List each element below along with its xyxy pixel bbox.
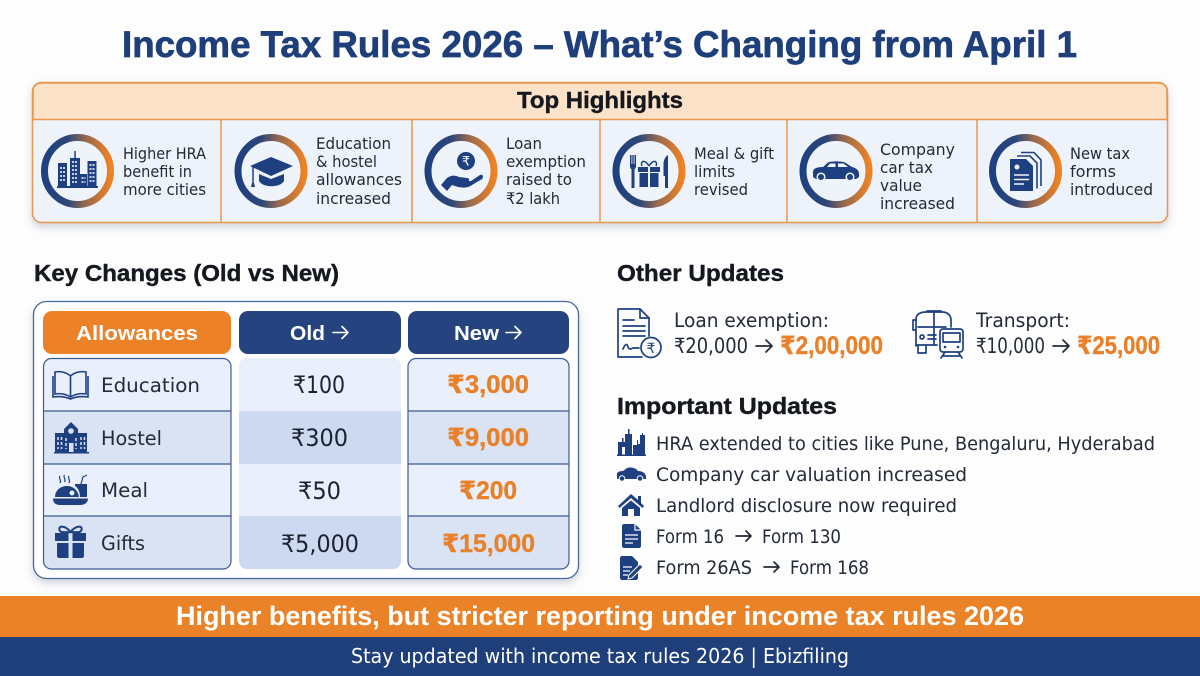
icon: document with pen <box>620 556 643 580</box>
column: new values <box>408 358 569 569</box>
text: education: Education <box>316 134 391 153</box>
text: loan: ₹2 lakh <box>506 189 560 208</box>
value: old gifts: ₹5,000 <box>281 530 359 558</box>
icon: house <box>618 494 644 516</box>
item: form 16: Form 16 <box>656 526 724 548</box>
icon: documents <box>1010 152 1041 191</box>
column header: old <box>239 311 401 354</box>
update: transport: ₹25,000 <box>1077 332 1160 360</box>
item: company car: Company car valuation increased <box>656 464 967 486</box>
text: meal: limits <box>694 162 735 181</box>
value: old education: ₹100 <box>293 371 345 399</box>
text: loan <box>506 134 586 208</box>
text: HRA: more cities <box>123 180 206 199</box>
text: loan: Loan <box>506 134 542 153</box>
icon: graduation cap <box>250 157 293 187</box>
update: transport: Transport: <box>975 309 1070 332</box>
row: hostel <box>54 422 162 454</box>
text: meal: Meal & gift <box>694 144 774 163</box>
text: loan: raised to <box>506 170 572 189</box>
update: loan exemption: ₹2,00,000 <box>780 332 883 360</box>
highlight: loan <box>428 134 586 208</box>
column header: allowances: Allowances <box>76 323 198 345</box>
icon: car <box>813 161 859 181</box>
text: new forms: forms <box>1070 162 1116 181</box>
icon: document with rupee <box>618 309 661 358</box>
icon: document <box>622 524 641 548</box>
update: transport <box>913 309 1160 360</box>
column: old values <box>239 358 401 569</box>
text: loan: exemption <box>506 152 586 171</box>
text: company car: car tax <box>880 158 933 177</box>
icon: open book <box>53 372 88 399</box>
column header: new <box>408 311 569 354</box>
icon: city <box>57 151 98 188</box>
banner: key message <box>0 596 1200 637</box>
footer <box>0 637 1200 676</box>
icon: meal <box>53 475 88 505</box>
value: new education: ₹3,000 <box>447 371 529 399</box>
icon: hand with rupee coin <box>441 152 483 191</box>
heading: top highlights: Top Highlights <box>517 87 683 113</box>
row: education <box>53 372 200 399</box>
column: allowances <box>43 358 231 569</box>
item: form 26AS: Form 168 <box>790 557 869 579</box>
column header: allowances <box>43 311 231 354</box>
item: form 16 <box>622 524 841 548</box>
row: gifts: Gifts <box>101 532 145 555</box>
item: form 26AS: Form 26AS <box>656 557 752 579</box>
text: company car: increased <box>880 194 955 213</box>
value: old hostel: ₹300 <box>291 424 348 452</box>
text: HRA <box>123 144 206 199</box>
icon: bus and train <box>913 311 963 358</box>
banner: key message: Higher benefits, but stricter reporting under income tax rules 2026 <box>176 601 1024 631</box>
text: company car <box>880 140 955 213</box>
text: education: & hostel <box>316 152 377 171</box>
column header: old: Old <box>290 323 325 345</box>
item: landlord disclosure: Landlord disclosure now required <box>656 495 957 517</box>
value: new hostel: ₹9,000 <box>447 424 529 452</box>
text: new forms: New tax <box>1070 144 1130 163</box>
item: form 16: Form 130 <box>762 526 841 548</box>
update: loan exemption: ₹20,000 <box>674 334 748 358</box>
item: form 26AS <box>620 556 869 580</box>
column header: new: New <box>454 323 499 345</box>
value: new gifts: ₹15,000 <box>442 530 535 558</box>
text: education <box>316 134 402 208</box>
text: meal <box>694 144 774 199</box>
item: HRA: HRA extended to cities like Pune, Bengaluru, Hyderabad <box>656 433 1155 455</box>
icon: car <box>617 467 646 481</box>
row: meal: Meal <box>101 479 148 502</box>
text: education: allowances <box>316 170 402 189</box>
highlight: company car <box>803 138 955 213</box>
update: loan exemption: Loan exemption: <box>674 309 829 332</box>
text: new forms: introduced <box>1070 180 1153 199</box>
text: company car: Company <box>880 140 955 159</box>
row: meal <box>53 475 148 505</box>
heading: other updates: Other Updates <box>617 260 784 286</box>
title: Income Tax Rules 2026 – What’s Changing from April 1 <box>122 24 1077 65</box>
text: meal: revised <box>694 180 748 199</box>
icon: fork, gift and knife <box>630 155 668 188</box>
highlight: meal and gift <box>616 138 774 204</box>
panel: key changes table <box>34 302 578 578</box>
highlight: HRA <box>44 138 206 204</box>
panel: top highlights <box>32 82 1168 222</box>
row: education: Education <box>101 374 200 397</box>
icon: document with rupee: ₹ <box>647 341 656 357</box>
highlight: new forms <box>992 138 1153 204</box>
update: transport: ₹10,000 <box>976 334 1045 358</box>
row: hostel: Hostel <box>101 427 162 450</box>
text: HRA: benefit in <box>123 162 192 181</box>
text: HRA: Higher HRA <box>123 144 206 163</box>
icon: city <box>617 429 646 456</box>
update: loan exemption <box>618 309 883 360</box>
footer: Stay updated with income tax rules 2026 | Ebizfiling <box>351 644 849 668</box>
text: company car: value <box>880 176 922 195</box>
value: old meal: ₹50 <box>298 477 341 505</box>
heading: key changes: Key Changes (Old vs New) <box>34 260 339 286</box>
list: important updates <box>617 429 1155 580</box>
text: education: increased <box>316 189 391 208</box>
heading: important updates: Important Updates <box>617 393 837 419</box>
text: new forms <box>1070 144 1153 199</box>
highlight: education <box>238 134 402 208</box>
icon: hostel building <box>54 422 89 454</box>
icon: hand with rupee coin: ₹ <box>462 154 470 170</box>
row: gifts <box>55 527 145 558</box>
value: new meal: ₹200 <box>459 477 517 505</box>
icon: gift box <box>55 527 86 558</box>
